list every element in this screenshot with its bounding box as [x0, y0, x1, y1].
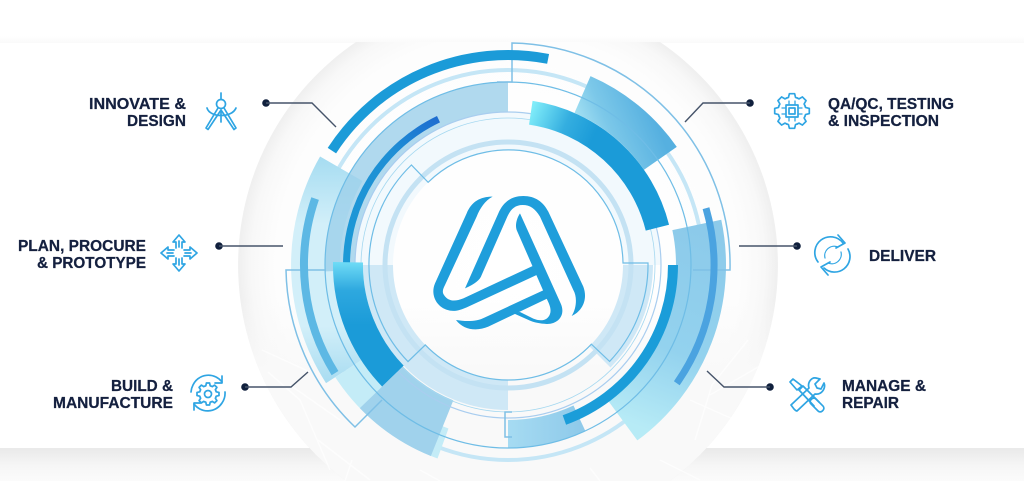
wedge: left outer [316, 169, 347, 370]
connector [215, 242, 283, 250]
pale inner bands [374, 131, 642, 395]
icon: gear with chip [775, 94, 809, 128]
sector: bottom right blue [508, 418, 579, 434]
item: qa qc testing inspection: & INSPECTION [828, 113, 939, 130]
item: build and manufacture: BUILD & [111, 378, 173, 395]
item: build and manufacture [53, 372, 308, 412]
arc: left narrow [304, 199, 335, 373]
sector: lower-left blue [381, 387, 442, 428]
circular wheel graphic [286, 43, 730, 460]
arc: right thick gradient [531, 113, 657, 228]
item: innovate and design: INNOVATE & [89, 96, 186, 113]
item: plan procure prototype: PLAN, PROCURE [18, 238, 146, 255]
icon: refresh arrows [815, 235, 850, 275]
arc: left thick block [348, 262, 393, 376]
ring: light band [313, 70, 703, 460]
item: manage and repair: REPAIR [842, 395, 899, 412]
wedge: upper right [582, 94, 660, 158]
outer thin ring upper right with steps [497, 43, 730, 270]
arc: right narrow outer [677, 208, 714, 383]
item: manage and repair [707, 371, 926, 413]
icon: gear with cycle arrows [191, 375, 225, 411]
connector [685, 99, 754, 122]
center logo [433, 196, 585, 329]
item: qa qc testing inspection [685, 94, 954, 130]
small step near bottom [505, 412, 512, 437]
connector [241, 372, 308, 391]
icon: drafting compass [206, 93, 236, 130]
item: plan procure prototype: & PROTOTYPE [37, 255, 146, 272]
sector: upper-left blue [340, 97, 508, 271]
connector [707, 371, 774, 391]
item: build and manufacture: MANUFACTURE [53, 395, 173, 412]
item: deliver: DELIVER [869, 248, 936, 265]
icon: four arrows [161, 235, 197, 271]
item: qa qc testing inspection: QA/QC, TESTING [828, 96, 954, 113]
wedge: lower right [622, 225, 701, 420]
item: plan procure prototype [18, 235, 283, 272]
wedge: lower-left pale band [349, 368, 443, 444]
icon: wrench and screwdriver [790, 378, 825, 413]
thin rings [325, 82, 691, 448]
notched inner ring [369, 150, 648, 380]
item: deliver [739, 235, 936, 275]
item: manage and repair: MANAGE & [842, 378, 926, 395]
outer thin ring lower left with steps [286, 270, 382, 427]
arc: right narrow inner [564, 265, 673, 420]
connector [262, 99, 336, 127]
connector [739, 242, 801, 250]
item: innovate and design: DESIGN [127, 113, 186, 130]
arc: top dark thick [332, 55, 548, 151]
arc: upper-left dark narrow [346, 119, 438, 265]
item: innovate and design [89, 93, 336, 130]
